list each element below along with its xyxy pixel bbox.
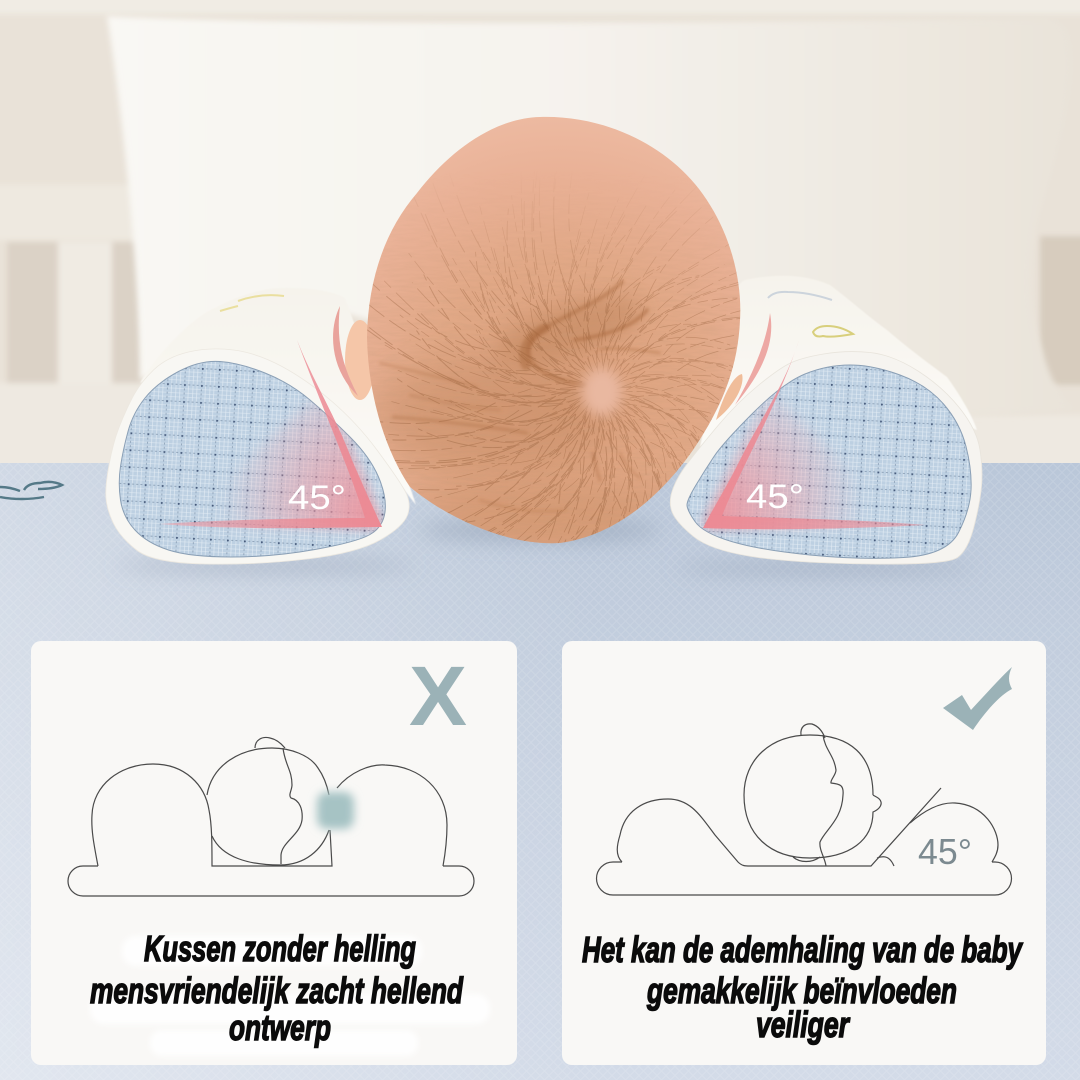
left 45 degree wedge — [160, 340, 382, 528]
large white background pillow — [107, 16, 1077, 416]
panel: pillow without slope — [31, 641, 517, 1065]
right 45 degree label: 45° — [746, 478, 804, 516]
blurred teal square — [317, 792, 354, 829]
dark hair bands — [380, 282, 660, 512]
photo background: nursery wall and crib — [0, 0, 1080, 473]
caption right: gemakkelijk beïnvloeden — [646, 970, 957, 1011]
diagram: 45 degree pillow with head — [596, 724, 1012, 895]
left neck pillow — [106, 288, 416, 564]
45 degree diagram label: 45° — [918, 831, 972, 872]
mattress decal — [0, 482, 62, 499]
right 45 degree wedge — [703, 340, 925, 529]
diagram: flat pillow with head — [68, 737, 474, 896]
lower head shading — [420, 489, 653, 544]
right pillow decals — [768, 292, 853, 337]
left pillow mesh face — [119, 361, 385, 557]
hair swirl strands — [367, 202, 740, 543]
baby ears and pink arcs — [333, 306, 771, 420]
baby head seen from above — [367, 116, 740, 544]
white halo behind caption — [90, 936, 490, 1056]
left pillow rim — [106, 349, 409, 564]
caption left: Kussen zonder helling — [144, 928, 416, 969]
caption right: veiliger — [756, 1004, 850, 1045]
right neck pillow — [670, 276, 982, 564]
pillow contact shadows — [115, 518, 975, 573]
right pillow rim — [670, 352, 982, 564]
left pillow body — [140, 288, 416, 505]
caption left: mensvriendelijk zacht hellend — [90, 970, 464, 1011]
brown hair cloud — [375, 363, 596, 468]
hair crown light spot — [582, 368, 622, 416]
left 45 degree label: 45° — [288, 479, 346, 517]
caption left — [90, 928, 464, 1048]
caption left: ontwerp — [229, 1007, 331, 1048]
icon: X mark: X — [409, 649, 467, 743]
brown shading around swirl arms — [500, 294, 642, 364]
icon: check mark — [943, 667, 1012, 730]
right pillow body — [700, 276, 977, 447]
blue mattress — [0, 463, 1080, 1080]
caption right — [582, 929, 1023, 1045]
panel: pillow with 45 degree slope — [562, 641, 1046, 1065]
panel background left — [31, 641, 517, 1065]
right pillow mesh face — [687, 365, 971, 558]
left pillow yellow decal — [220, 295, 284, 311]
panel background right — [562, 641, 1046, 1065]
